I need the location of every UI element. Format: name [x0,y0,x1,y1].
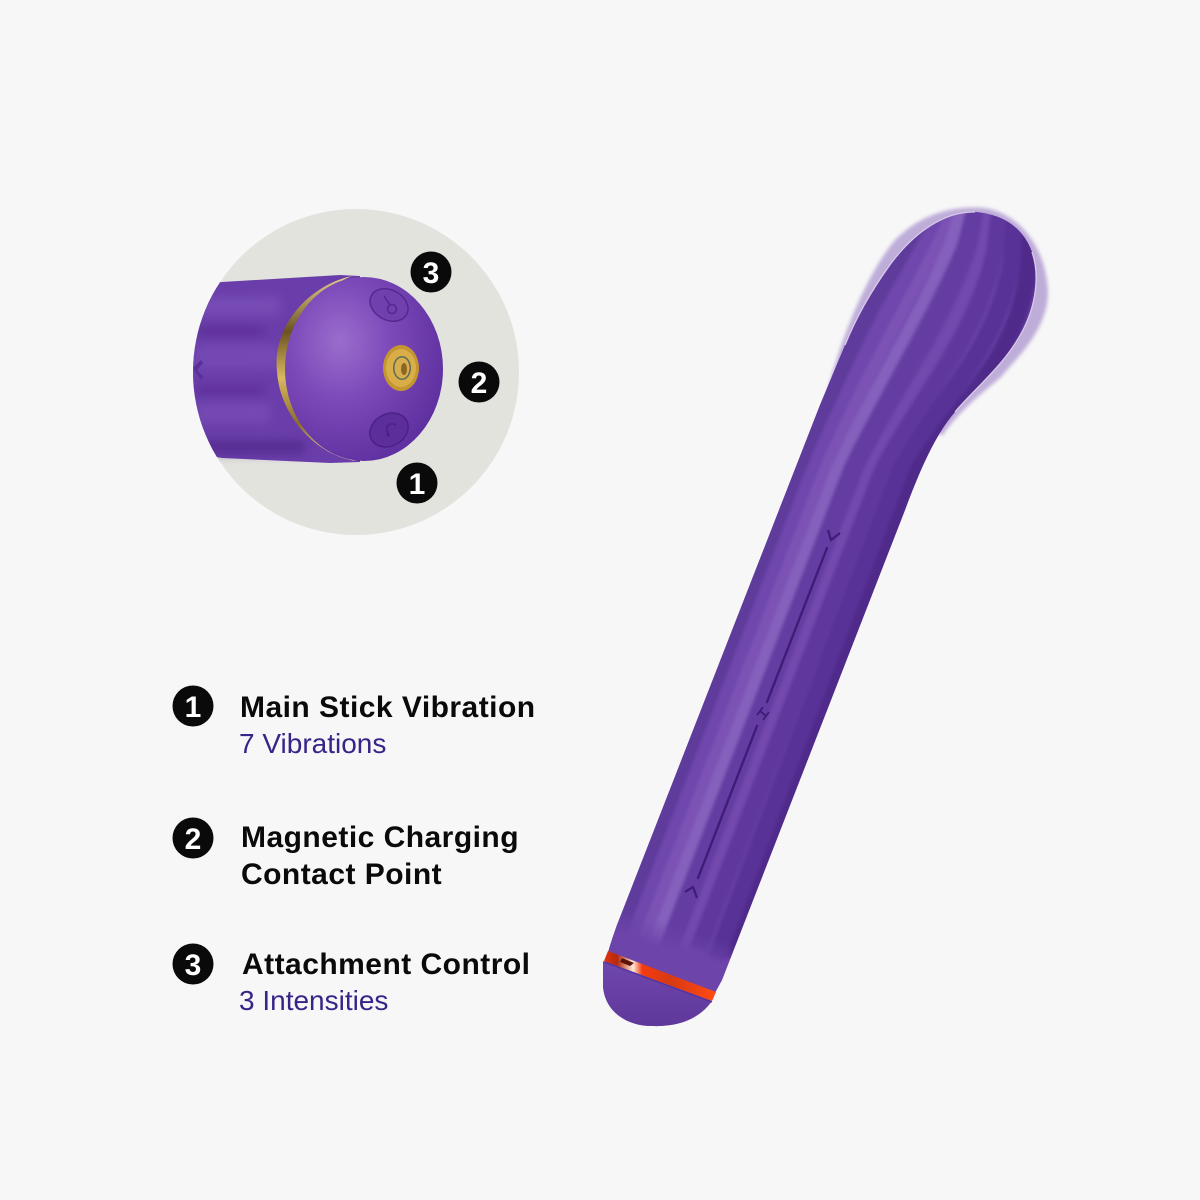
legend badge 1 [172,686,214,726]
legend badge 1: 1 [185,691,201,724]
product: full stick [590,195,1048,1026]
button: attachment control [369,288,409,322]
icon: bolt [757,707,769,720]
legend item 2 [172,818,519,891]
legend badge 2: 2 [185,823,201,856]
inset: close-up of the control end [180,209,519,535]
button: main stick [369,412,409,448]
badge 3: 3 [423,257,439,290]
legend subtext 3: 3 Intensities [239,985,388,1016]
legend badge 2 [172,818,214,858]
head dome [285,277,443,461]
legend badge 3 [172,944,214,984]
lengthwise swirl ridges [614,195,1032,960]
badge 1 [396,462,438,504]
charging contact [383,345,419,391]
legend heading 1: Main Stick Vibration [240,691,536,724]
head rim highlight [845,212,1036,412]
slider groove lower [698,726,757,878]
icon: bottom chevron [685,887,697,898]
inset circle background [193,209,519,535]
icon: top chevron [828,530,840,540]
legend subtext 1: 7 Vibrations [239,728,386,759]
smooth band above LED [603,918,732,1010]
badge 1: 1 [409,468,425,501]
gold ring [277,276,356,461]
legend heading 2: Contact Point [241,858,442,891]
legend heading 3: Attachment Control [242,948,530,981]
slider groove upper [767,548,827,702]
end cap [603,961,712,1026]
LED ring [604,951,716,1002]
legend item 1 [172,686,536,759]
badge 3 [410,252,452,292]
legend item 3 [172,944,530,1016]
legend badge 3: 3 [185,949,201,982]
legend heading 2: Magnetic Charging [241,821,519,854]
motion halo around head [828,207,1048,436]
close-up product end [180,275,443,463]
badge 2: 2 [471,367,487,400]
stick body [603,212,1036,1026]
badge 2 [458,362,500,402]
